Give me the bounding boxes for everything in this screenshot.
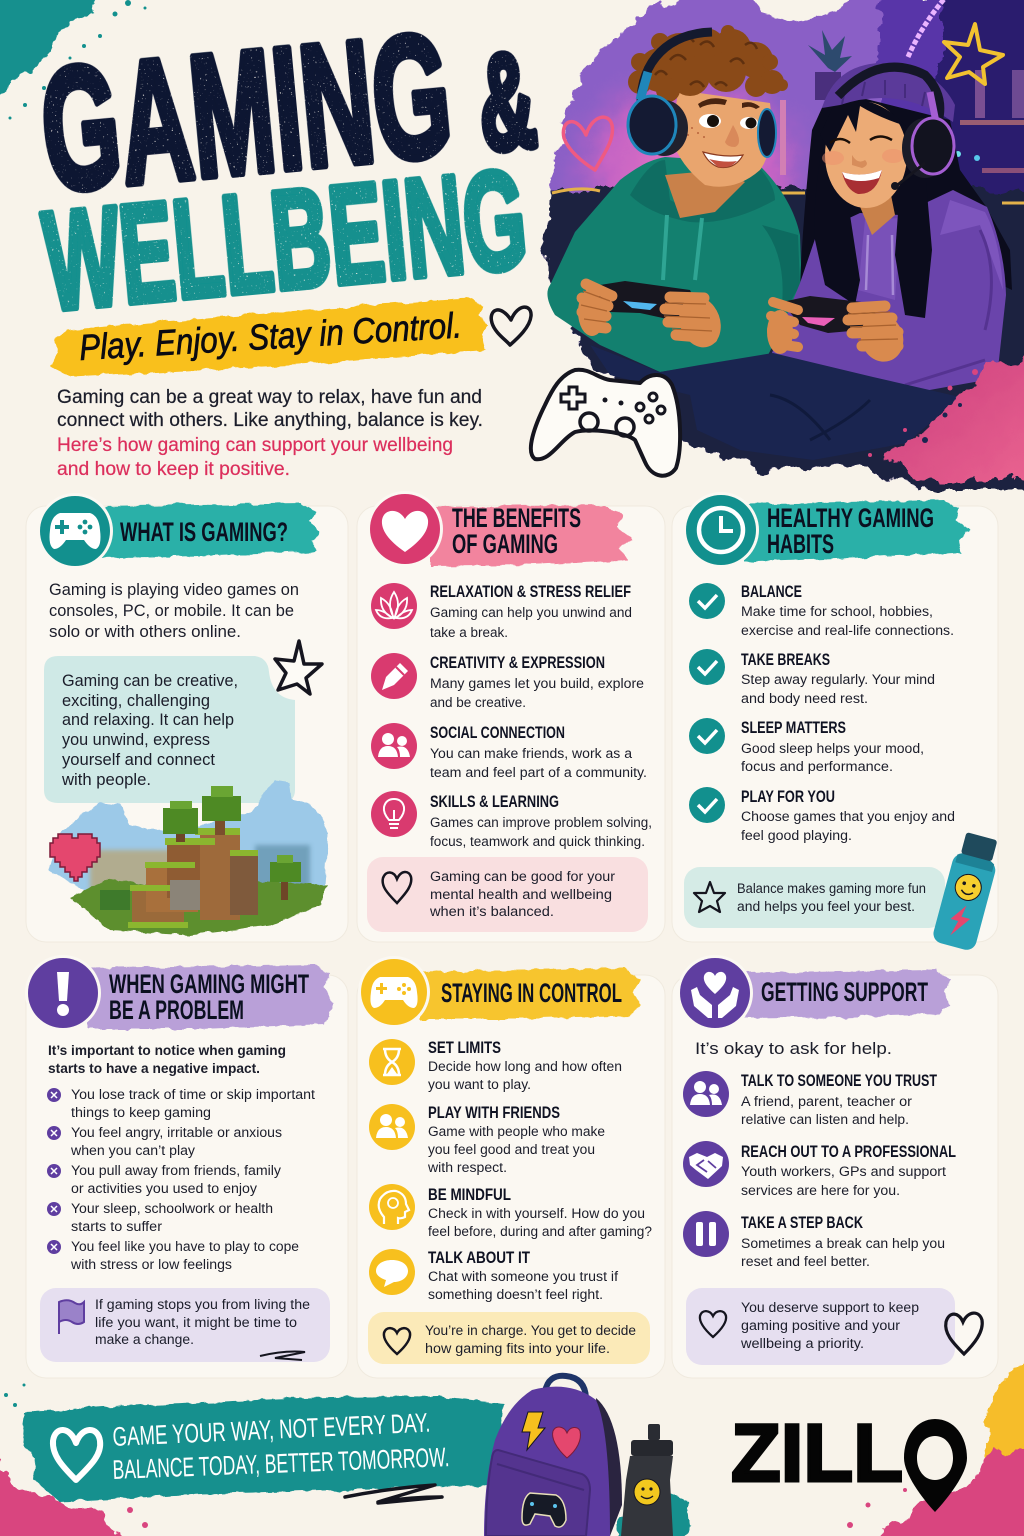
item: set limits: SET LIMITS xyxy=(428,1038,501,1057)
jeans xyxy=(590,345,960,460)
heading banner xyxy=(25,955,333,1031)
callout: make a change. xyxy=(95,1332,194,1347)
item: skills: focus, teamwork and quick thinking. xyxy=(430,834,645,849)
callout: how gaming fits into your life. xyxy=(425,1341,610,1356)
callout: when it’s balanced. xyxy=(429,904,554,919)
heading banner: GETTING SUPPORT xyxy=(761,977,928,1007)
item: play with friends: you feel good and treat you xyxy=(428,1142,595,1157)
item: creativity: and be creative. xyxy=(430,695,526,710)
item: creativity: Many games let you build, explore xyxy=(430,676,644,691)
item: social connection: team and feel part of a community. xyxy=(430,765,647,780)
heading banner xyxy=(677,955,951,1031)
intro paragraph: consoles, PC, or mobile. It can be xyxy=(49,602,294,620)
intro text xyxy=(57,387,483,480)
boy face details xyxy=(687,98,760,168)
item: talk about it: something doesn’t feel right. xyxy=(428,1287,603,1302)
warning list: with stress or low feelings xyxy=(70,1257,232,1272)
item: talk to someone: relative can listen and help. xyxy=(741,1112,909,1127)
patch: lightning xyxy=(522,1412,545,1450)
callout: You’re in charge. You get to decide xyxy=(425,1323,636,1338)
icon: neon heart xyxy=(563,117,612,170)
heading banner: HABITS xyxy=(767,529,834,559)
title line 2: WELLBEING xyxy=(37,140,533,340)
item: sleep matters: SLEEP MATTERS xyxy=(741,718,846,737)
item: skills: SKILLS & LEARNING xyxy=(430,792,559,811)
girl neck and front hair xyxy=(855,190,895,235)
icon: pixel heart xyxy=(50,834,100,881)
callout: and helps you feel your best. xyxy=(737,899,915,914)
warning list xyxy=(47,1087,315,1272)
callout: mental health and wellbeing xyxy=(430,887,612,902)
intro text: and how to keep it positive. xyxy=(57,459,290,480)
lead text xyxy=(48,1043,286,1076)
callout xyxy=(368,1312,650,1364)
item: skills: Games can improve problem solving, xyxy=(430,815,652,830)
item: social connection: You can make friends, work as a xyxy=(430,746,633,761)
title: Gaming & Wellbeing xyxy=(33,0,542,340)
item: talk to someone: A friend, parent, teacher or xyxy=(741,1094,913,1109)
boy hair xyxy=(628,25,788,102)
callout box: with people. xyxy=(61,771,151,789)
tagline banner: Play. Enjoy. Stay in Control. xyxy=(78,304,463,368)
intro text: connect with others. Like anything, balance is key. xyxy=(57,410,483,431)
heading banner: BE A PROBLEM xyxy=(109,995,244,1025)
illustration: blocky landscape xyxy=(50,780,328,935)
lead text: It’s okay to ask for help. xyxy=(695,1040,892,1058)
item: reach out to a professional: services are here for you. xyxy=(741,1183,900,1198)
boy headphones xyxy=(628,32,776,157)
item: play with friends: PLAY WITH FRIENDS xyxy=(428,1103,560,1122)
intro text: Here’s how gaming can support your wellbeing xyxy=(57,435,453,456)
heading banner: STAYING IN CONTROL xyxy=(441,978,622,1008)
girl face xyxy=(825,102,907,208)
slogan text: GAME YOUR WAY, NOT EVERY DAY. xyxy=(112,1408,431,1452)
item: be mindful: feel before, during and after gaming? xyxy=(428,1224,652,1239)
panel: healthy gaming habits xyxy=(672,492,1003,952)
callout box: and relaxing. It can help xyxy=(62,711,234,729)
logo: Zillo xyxy=(731,1408,967,1512)
item: balance: BALANCE xyxy=(741,582,802,601)
lead text: It’s important to notice when gaming xyxy=(48,1043,286,1058)
item: set limits: Decide how long and how often xyxy=(428,1059,622,1074)
callout box: yourself and connect xyxy=(62,751,215,769)
girl face details xyxy=(822,136,904,194)
item: play with friends: Game with people who make xyxy=(428,1124,605,1139)
item: play with friends: with respect. xyxy=(427,1160,507,1175)
panel: getting support xyxy=(672,955,998,1378)
intro paragraph xyxy=(49,581,299,641)
patch: pixel heart xyxy=(553,1427,580,1458)
callout: wellbeing a priority. xyxy=(740,1336,864,1351)
logo: Zillo: ZILL xyxy=(731,1408,903,1499)
callout xyxy=(686,1288,955,1365)
boy head xyxy=(672,90,771,187)
item: balance: exercise and real-life connections. xyxy=(741,623,954,638)
callout box xyxy=(44,656,295,803)
item: set limits: you want to play. xyxy=(428,1077,531,1092)
item: reach out to a professional: Youth workers, GPs and support xyxy=(741,1164,946,1179)
icon: water bottle xyxy=(931,831,1003,952)
illustration: backpack xyxy=(484,1376,622,1536)
callout: Balance makes gaming more fun xyxy=(737,881,926,896)
callout xyxy=(40,1288,330,1362)
icon: game controller outline xyxy=(531,370,680,476)
heading banner: WHEN GAMING MIGHT xyxy=(109,969,309,999)
item: play for you: feel good playing. xyxy=(741,828,852,843)
item: reach out to a professional xyxy=(683,1141,956,1198)
girl beanie and bangs xyxy=(820,63,955,152)
item: be mindful: BE MINDFUL xyxy=(428,1185,511,1204)
callout box: Gaming can be creative, xyxy=(62,672,238,690)
item: take a step back: TAKE A STEP BACK xyxy=(741,1213,864,1232)
callout: Gaming can be good for your xyxy=(430,869,616,884)
warning list: Your sleep, schoolwork or health xyxy=(71,1201,273,1216)
heading banner: OF GAMING xyxy=(452,529,558,559)
girl controller and hands xyxy=(767,296,910,368)
warning list: You feel like you have to play to cope xyxy=(71,1239,299,1254)
room background xyxy=(530,0,1024,500)
item: relaxation: RELAXATION & STRESS RELIEF xyxy=(430,582,631,601)
intro paragraph: solo or with others online. xyxy=(49,623,241,641)
icon: outline heart xyxy=(946,1313,982,1354)
warning list: starts to suffer xyxy=(71,1219,163,1234)
item: play for you xyxy=(689,787,955,843)
panel: benefits of gaming xyxy=(357,491,665,942)
item: sleep matters: Good sleep helps your mood, xyxy=(741,741,924,756)
item: skills xyxy=(371,791,652,849)
girl headset xyxy=(838,67,954,190)
boy hoodie xyxy=(547,157,802,372)
item: balance xyxy=(689,582,954,638)
item: talk about it xyxy=(369,1248,618,1302)
icon: hand drawn heart beside tagline xyxy=(491,307,531,345)
warning list: or activities you used to enjoy xyxy=(71,1181,257,1196)
item: be mindful: Check in with yourself. How do you xyxy=(428,1206,645,1221)
item: social connection xyxy=(371,723,647,780)
patch: controller xyxy=(522,1493,566,1527)
item: be mindful xyxy=(369,1184,652,1239)
pink paint bottom right xyxy=(868,352,1024,480)
item: social connection: SOCIAL CONNECTION xyxy=(430,723,565,742)
callout box: you unwind, express xyxy=(62,731,210,749)
item: talk to someone xyxy=(683,1071,937,1127)
paint splash: bottom corners xyxy=(0,1355,1024,1536)
panel: staying in control xyxy=(357,956,665,1378)
paint splash: top left teal xyxy=(0,0,146,120)
intro text: Gaming can be a great way to relax, have fun and xyxy=(57,387,482,408)
warning list: You feel angry, irritable or anxious xyxy=(71,1125,282,1140)
item: talk about it: Chat with someone you trust if xyxy=(428,1269,618,1284)
item: relaxation: Gaming can help you unwind and xyxy=(430,605,632,620)
panel: when gaming might be a problem xyxy=(25,955,348,1378)
item: take breaks xyxy=(689,649,935,706)
item: play with friends xyxy=(369,1103,605,1175)
icon: heart outline xyxy=(53,1430,100,1480)
warning list: when you can’t play xyxy=(70,1143,195,1158)
item: sleep matters: focus and performance. xyxy=(741,759,893,774)
girl hoodie xyxy=(770,190,1006,394)
warning list: You lose track of time or skip important xyxy=(71,1087,315,1102)
item: creativity: CREATIVITY & EXPRESSION xyxy=(430,653,605,672)
heading banner xyxy=(683,492,970,568)
room details xyxy=(552,0,1024,203)
intro paragraph: Gaming is playing video games on xyxy=(49,581,299,599)
item: talk to someone: TALK TO SOMEONE YOU TRUST xyxy=(741,1071,937,1090)
item: reach out to a professional: REACH OUT TO A PROFESSIONAL xyxy=(741,1142,956,1161)
item: relaxation xyxy=(371,582,632,640)
girl back hair xyxy=(800,90,1012,320)
item: sleep matters xyxy=(689,718,924,774)
heading banner: THE BENEFITS xyxy=(452,503,581,533)
heading banner xyxy=(367,491,632,567)
closing banner: BALANCE TODAY, BETTER TOMORROW. xyxy=(112,1442,450,1485)
scribble under banner xyxy=(345,1485,442,1503)
icon: star outline xyxy=(275,641,322,694)
item: take a step back: Sometimes a break can help you xyxy=(741,1236,945,1251)
item: talk about it: TALK ABOUT IT xyxy=(428,1248,530,1267)
warning list: You pull away from friends, family xyxy=(71,1163,281,1178)
heading banner: WHAT IS GAMING? xyxy=(120,517,288,547)
item: set limits xyxy=(369,1038,622,1092)
paper showing through at top edge xyxy=(748,0,855,22)
heading banner xyxy=(37,493,320,569)
item: play for you: Choose games that you enjoy and xyxy=(741,809,955,824)
item: balance: Make time for school, hobbies, xyxy=(741,604,933,619)
callout xyxy=(367,857,648,932)
callout xyxy=(684,867,945,928)
callout: gaming positive and your xyxy=(741,1318,901,1333)
item: take breaks: Step away regularly. Your mind xyxy=(741,672,935,687)
illustration: black bottle xyxy=(621,1424,673,1536)
item: take breaks: and body need rest. xyxy=(741,691,868,706)
icon: neon star xyxy=(944,24,1003,84)
hero illustration: two teens gaming on a sofa xyxy=(530,0,1024,500)
item: relaxation: take a break. xyxy=(430,625,508,640)
boy controller and hands xyxy=(578,281,728,353)
item: take breaks: TAKE BREAKS xyxy=(741,650,830,669)
callout box: exciting, challenging xyxy=(62,692,210,710)
closing banner xyxy=(22,1396,504,1502)
heading banner: HEALTHY GAMING xyxy=(767,503,934,533)
item: play for you: PLAY FOR YOU xyxy=(741,787,835,806)
lead text: starts to have a negative impact. xyxy=(48,1061,260,1076)
callout: You deserve support to keep xyxy=(741,1300,919,1315)
warning list: things to keep gaming xyxy=(71,1105,211,1120)
heading banner xyxy=(358,956,641,1028)
item: take a step back: reset and feel better. xyxy=(741,1254,870,1269)
callout: life you want, it might be time to xyxy=(95,1315,297,1330)
item: creativity xyxy=(371,653,644,710)
callout: If gaming stops you from living the xyxy=(95,1297,310,1312)
item: take a step back xyxy=(683,1211,945,1269)
panel: what is gaming xyxy=(26,493,348,942)
